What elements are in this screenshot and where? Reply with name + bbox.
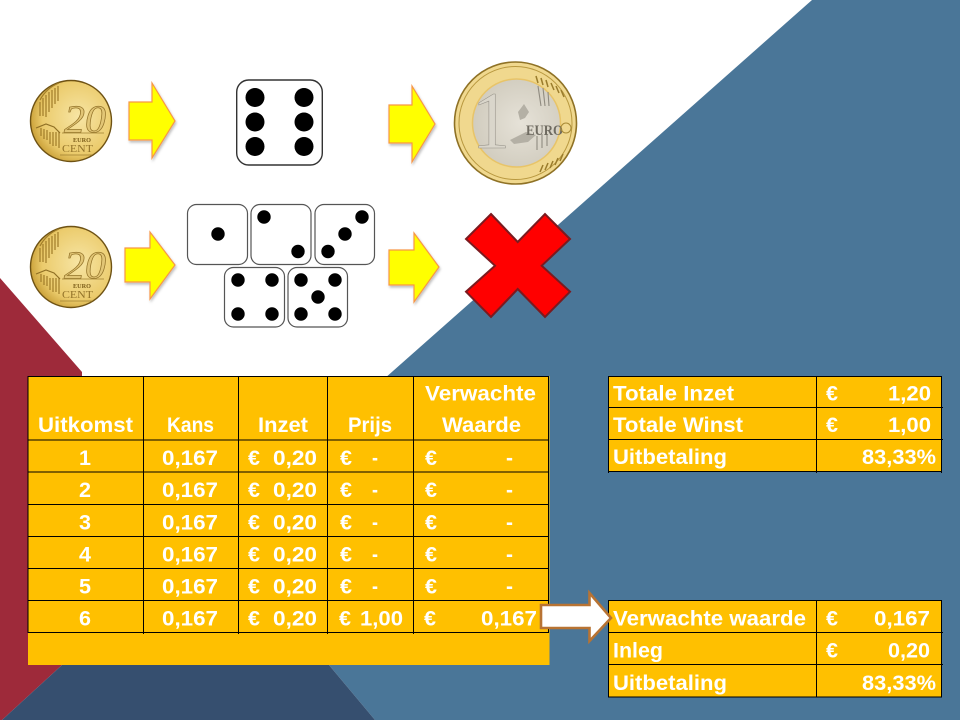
totale winst row: 1,00	[888, 413, 931, 437]
table header row: Kans	[167, 413, 214, 437]
uitbetaling row	[613, 445, 936, 469]
inleg row: Inleg	[613, 639, 663, 663]
table row 5: €	[425, 575, 437, 599]
table row 4: €	[340, 543, 352, 567]
table row 4: 0,20	[273, 543, 317, 567]
table row 3: 3	[79, 510, 91, 534]
table row 3: €	[248, 510, 260, 534]
icon: 20 cent coin, top row: 20	[64, 98, 106, 141]
table row 1: 1	[79, 446, 91, 470]
uitbetaling row: 83,33%	[862, 445, 936, 469]
table header row: Inzet	[258, 413, 308, 437]
table row 3: €	[425, 510, 437, 534]
table row 5: 0,20	[273, 575, 317, 599]
totale inzet row: €	[826, 382, 838, 406]
background: red triangle	[0, 278, 82, 720]
table row 2: €	[340, 478, 352, 502]
icon: die showing two	[251, 204, 311, 264]
verwachte waarde row: €	[826, 607, 838, 631]
table row 2: 0,20	[273, 478, 317, 502]
arrow: coin to losing dice	[125, 232, 175, 299]
verwachte waarde row: 0,167	[874, 607, 930, 631]
arrow: coin to six die	[129, 83, 175, 158]
icon: 20 cent coin, bottom row: 20	[64, 244, 106, 287]
table row 2: 0,167	[162, 478, 218, 502]
table row 2: 2	[79, 478, 91, 502]
table row 6: 0,167	[481, 607, 537, 631]
table row 5: 5	[79, 575, 91, 599]
table row 1: 0,167	[162, 446, 218, 470]
table row 4	[79, 543, 513, 567]
uitbetaling row: 83,33%	[862, 671, 936, 695]
table row 6: €	[339, 607, 351, 631]
icon: 20 cent coin, top row: CENT	[62, 143, 93, 155]
table row 4: €	[248, 543, 260, 567]
arrow: losing dice to cross	[389, 233, 439, 302]
icon: 20 cent coin, bottom row: CENT	[62, 289, 93, 301]
table row 2: €	[248, 478, 260, 502]
table row 1: -	[506, 446, 513, 470]
table row 2: -	[506, 478, 513, 502]
table row 6: 6	[79, 607, 91, 631]
icon: 20 cent coin, bottom row: EURO	[73, 284, 91, 290]
inleg row: 0,20	[888, 639, 930, 663]
totale inzet row	[613, 382, 931, 406]
icon: die showing five	[288, 268, 348, 327]
icon: 1 euro coin: EURO	[526, 123, 563, 139]
table row 5: €	[248, 575, 260, 599]
uitbetaling row	[613, 671, 936, 695]
icon: red cross	[466, 214, 570, 317]
table row 3: -	[506, 510, 513, 534]
uitbetaling row: Uitbetaling	[613, 671, 727, 695]
icon: 20 cent coin, top row	[30, 80, 112, 162]
background: blue triangle	[329, 0, 960, 720]
inleg row	[613, 639, 930, 663]
table row 6: €	[424, 607, 436, 631]
table row 2: -	[372, 478, 378, 502]
table row 1: €	[248, 446, 260, 470]
table row 6: 0,167	[162, 607, 218, 631]
table: uitkomsten	[28, 376, 550, 665]
background: navy shape	[2, 665, 375, 720]
table row 1: 0,20	[273, 446, 317, 470]
table row 1: €	[425, 446, 437, 470]
verwachte waarde row: Verwachte waarde	[613, 607, 806, 631]
table row 5	[79, 575, 513, 599]
icon: 1 euro coin: 1	[472, 75, 510, 166]
table row 1: -	[372, 446, 378, 470]
icon: 1 euro coin	[454, 62, 576, 184]
table header row: Waarde	[442, 413, 521, 437]
icon: die showing one	[188, 204, 248, 264]
icon: die showing four	[224, 268, 284, 327]
table row 3: -	[372, 510, 378, 534]
table row 6: 1,00	[360, 607, 403, 631]
table header row: Verwachte	[425, 382, 536, 406]
table row 3: 0,20	[273, 510, 317, 534]
totale inzet row: 1,20	[888, 382, 931, 406]
table row 3: 0,167	[162, 510, 218, 534]
totale inzet row: Totale Inzet	[613, 382, 734, 406]
table row 5: €	[340, 575, 352, 599]
table row 2	[79, 478, 513, 502]
table header row: Prijs	[348, 413, 392, 437]
table row 4: €	[425, 543, 437, 567]
table: verwachte waarde	[608, 600, 943, 697]
table row 4: -	[372, 543, 378, 567]
icon: 20 cent coin, bottom row	[30, 226, 112, 308]
totale winst row: €	[826, 413, 838, 437]
table row 1: €	[340, 446, 352, 470]
table row 2: €	[425, 478, 437, 502]
icon: die showing six	[237, 80, 322, 165]
table row 5: -	[506, 575, 513, 599]
table row 4: -	[506, 543, 513, 567]
totale winst row: Totale Winst	[613, 413, 743, 437]
table header row: Uitkomst	[38, 413, 133, 437]
uitbetaling row: Uitbetaling	[613, 445, 727, 469]
totale winst row	[613, 413, 931, 437]
inleg row: €	[826, 639, 838, 663]
table: totalen	[608, 376, 943, 473]
table row 6: €	[248, 607, 260, 631]
icon: die showing three	[315, 204, 374, 264]
table header row	[38, 382, 536, 437]
table row 5: 0,167	[162, 575, 218, 599]
table row 6	[79, 607, 537, 631]
verwachte waarde row	[613, 607, 930, 631]
table row 4: 0,167	[162, 543, 218, 567]
arrow: table to verwachte waarde	[541, 593, 611, 641]
table row 1	[79, 446, 513, 470]
table row 4: 4	[79, 543, 91, 567]
icon: 20 cent coin, top row: EURO	[73, 138, 91, 144]
table row 3: €	[340, 510, 352, 534]
table row 6: 0,20	[273, 607, 317, 631]
table row 3	[79, 510, 513, 534]
arrow: six die to 1 euro	[389, 86, 435, 162]
table row 5: -	[372, 575, 378, 599]
